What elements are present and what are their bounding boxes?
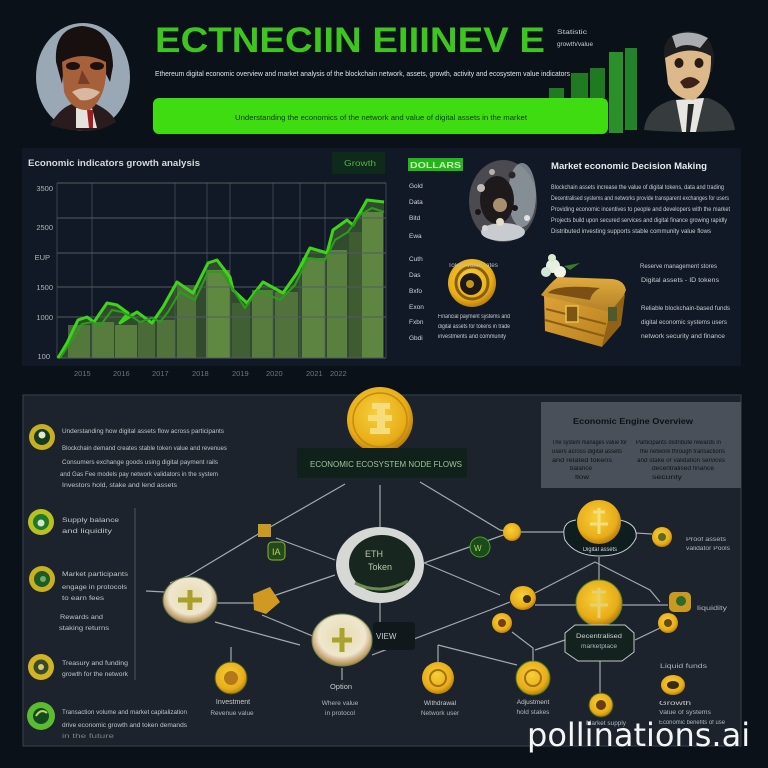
chart x axis labels: 2017 [152,369,169,378]
icon: left list 1 [29,424,55,450]
line and bar chart [57,183,386,358]
box: middle label: marketplace [581,644,618,650]
title side note: growth/value [557,41,593,48]
title side note: Statistic [557,29,588,36]
caption: bottom 2: Withdrawal [424,700,457,707]
text: left list 5: drive economic growth and token demands [62,722,188,729]
side labels list: Data [409,199,423,206]
caption: coin lower right [659,701,726,726]
side labels list: Bxfo [409,288,422,295]
icon: node mid low [492,613,512,633]
side labels list: Exon [409,304,424,311]
chart heading: Economic indicators growth analysis [28,158,200,169]
icon: small node b [253,587,280,614]
paragraph: right column [551,184,730,235]
text: left list 5 [62,709,188,740]
chest text bottom: Reliable blockchain-based funds [641,305,731,312]
coin: bottom 3 [516,661,550,695]
text: left list 2: Supply balance [62,517,119,524]
icon: node far right [669,592,691,612]
icon: coin lower right [661,675,685,695]
chest text top: Digital assets - ID tokens [641,277,720,284]
chart x axis labels: 2018 [192,369,209,378]
coin: middle right [576,580,622,626]
panel: lower network [23,395,741,746]
panel: upper dashboard [22,148,741,366]
node: center ring: ETH [365,549,383,559]
coin: top gold [347,387,413,453]
side labels list [409,183,424,342]
chart y axis labels: 100 [37,352,50,361]
side labels list: Ewa [409,233,422,240]
callout: grey box: security [652,475,682,481]
chest text bottom [641,305,731,340]
node: lower coin [312,614,372,666]
icon: left list 3 [29,566,55,592]
ring caption [438,314,511,340]
text: left list 3 [59,571,129,632]
chart grid [57,183,386,358]
text: left list 2 [62,517,119,535]
caption: lower coin [322,682,359,717]
chart badge [332,152,385,174]
icon: small green node: IA [272,547,281,557]
callout: grey box: Economic Engine Overview [573,416,693,426]
text: left list 3: to earn fees [62,595,105,602]
icon: gold ring [448,259,496,307]
paragraph: right column: Blockchain assets increase the value of digital tokens, data and trading [551,184,724,191]
green tag [408,158,463,171]
network connectors [135,482,668,693]
side labels list: Fxbn [409,319,424,326]
banner: green highlight: Understanding the economics of the network and value of digital assets in the market [235,113,528,122]
icon: node mid [510,586,536,610]
banner: network title: ECONOMIC ECOSYSTEM NODE FLOWS [310,459,462,469]
callout: grey box: Participants distribute rewards in [636,440,721,446]
icon: left list 2 [28,509,54,535]
ring caption: investments and community [438,334,506,340]
text: left list 3: staking returns [59,625,110,632]
chest text bottom: digital economic systems users [641,319,728,326]
chart x axis labels: 2020 [266,369,283,378]
text: left list 1 [60,428,228,489]
text: left list 1: Blockchain demand creates stable token value and revenues [62,445,228,452]
caption: bottom 1: Revenue value [210,710,254,717]
tag: lower node: VIEW [376,632,397,641]
caption: lower coin: Option [330,682,352,691]
title: ECTNECIIN EIIINEV E [155,21,545,60]
icon: header bars [549,48,637,133]
icon: node right low [658,613,678,633]
icon: left list 4 [28,654,54,680]
chart line [58,200,384,358]
icon: left list 5 [27,702,55,730]
chart bars [68,212,383,358]
icon: flowers [541,254,580,278]
caption: right small: Proof assets [686,537,726,543]
caption: coin lower right: Growth [659,701,691,707]
icon: treasure chest [541,277,626,347]
callout: grey box [541,402,741,488]
text: left list 4: Treasury and funding [62,660,128,667]
coin: upper right: Digital assets [583,547,617,553]
coin: bottom 2 [422,662,454,694]
side labels list: Das [409,272,421,279]
ring caption: digital assets for tokens in trade [438,324,511,330]
icon: green badge: W [474,544,482,553]
chest text top: Reserve management stores [640,263,718,270]
text: left list 1: Understanding how digital assets flow across participants [62,428,225,435]
text: left list 4 [62,660,129,678]
chart x axis labels: 2016 [113,369,130,378]
banner: green highlight [153,98,608,134]
chart area fill [58,200,384,358]
text: left list 5: in the future [62,733,114,740]
callout: grey box: balance [570,466,593,472]
chart x axis labels: 2015 [74,369,91,378]
caption: right small: validator Pools [686,546,730,552]
caption: lower coin: in protocol [325,710,356,717]
chart x axis labels [74,369,347,378]
coin: bottom 4 [589,693,613,717]
paragraph: right column: Distributed investing supports stable community value flows [551,228,712,235]
caption: coin lower right: Value of systems [659,710,711,716]
caption: bottom 3: Adjustment [517,699,549,706]
text: left list 3: engage in protocols [62,584,128,591]
chest text top [640,263,720,284]
side labels list: Gold [409,183,423,190]
icon: node right small [503,523,521,541]
caption: bottom 3: hold stakes [517,709,550,716]
icon: small node a [258,524,271,537]
caption: lower coin: Where value [322,700,359,707]
chart y axis labels [35,184,53,361]
portrait: left man [36,23,130,131]
heading: right column: Market economic Decision Making [551,161,707,172]
chest text bottom: network security and finance [641,333,725,340]
callout: grey box: and stake or validation services [637,458,725,464]
caption: coin lower right top: Liquid funds [660,663,708,670]
callout: grey box: the network through transactions [640,449,725,455]
caption: bottom 1: Investment [216,699,250,706]
node: center ring [336,527,424,603]
icon: green badge [470,537,490,557]
subtitle: Ethereum digital economic overview and market analysis of the blockchain network, assets, growth, activity and ecosystem value indicators [155,69,570,78]
box: middle label: Decentralised [576,633,622,640]
side labels list: Bitd [409,215,421,222]
icon: small green node [268,542,285,560]
box: middle label [565,625,634,661]
mosaic disc [469,160,537,242]
text: left list 3: Rewards and [60,614,103,621]
ring caption: Financial payment systems and [438,314,510,320]
chart x axis labels: 2021 [306,369,323,378]
caption: bottom 2: Network user [421,710,460,717]
text: left list 2: and liquidity [62,528,113,535]
watermark: pollinations.ai [527,716,750,754]
tag: lower node [373,622,415,650]
paragraph: right column: Providing economic incentives to people and developers with the market [551,206,730,213]
node: left coin [163,577,217,623]
paragraph: right column: Projects build upon secured services and digital finance growing rapidly [551,217,728,224]
chart y axis labels: 1500 [36,283,53,292]
chart badge: Growth [344,159,376,168]
title side note [557,29,593,48]
side labels list: Gbdi [409,335,423,342]
callout: grey box: and related tokens [552,458,612,464]
ring caption top: Token value rates [448,263,498,269]
icon: coin right small [652,527,672,547]
coin: upper right [564,500,636,556]
green tag: DOLLARS [410,160,461,170]
text: left list 1: Investors hold, stake and lend assets [62,482,178,489]
label: far right: liquidity [697,605,728,612]
text: left list 5: Transaction volume and market capitalization [62,709,187,716]
side labels list: Cuth [409,256,423,263]
node: center ring: Token [368,562,392,572]
chart x axis labels: 2019 [232,369,249,378]
caption: bottom 1 [210,699,254,717]
caption: right small [686,537,730,552]
callout: grey box: users across digital assets [552,449,622,455]
text: left list 4: growth for the network [62,671,129,678]
banner: network title [297,448,467,478]
text: left list 1: Consumers exchange goods using digital payment rails [62,459,219,466]
coin: bottom 1 [215,662,247,694]
caption: bottom 4: Market supply [586,720,627,727]
chart y axis labels: 2500 [36,223,53,232]
portrait: right man [644,31,735,132]
chart y axis labels: 1000 [36,313,53,322]
chart x axis labels: 2022 [330,369,347,378]
callout: grey box: The system manages value for [552,440,627,446]
chart y axis labels: EUP [35,253,50,262]
caption: bottom 3 [517,699,550,716]
chart y axis labels: 3500 [36,184,53,193]
callout: grey box: decentralised finance [652,466,715,472]
text: left list 1: and Gas Fee models pay network validators in the system [60,471,218,478]
caption: coin lower right: Economic benefits of use [659,720,726,726]
text: left list 3: Market participants [62,571,129,578]
caption: bottom 2 [421,700,460,717]
callout: grey box: flow [575,475,590,481]
